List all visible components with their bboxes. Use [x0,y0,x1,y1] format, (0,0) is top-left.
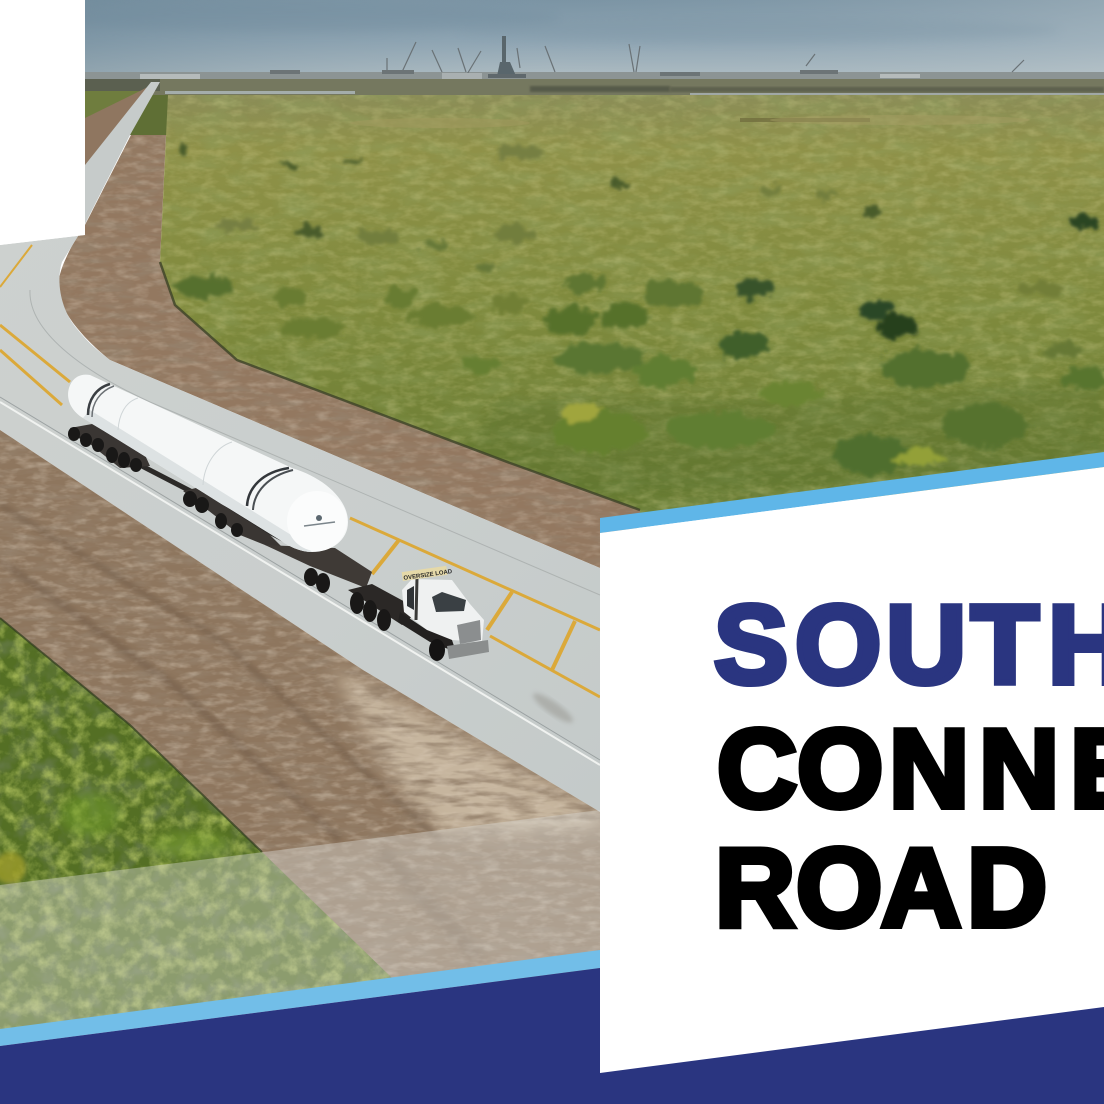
trailer and wheels [68,424,420,631]
sign: oversize load: OVERSIZE LOAD [403,569,453,582]
white corner panel top left [0,0,85,245]
light blue stripe lower left [0,950,600,1046]
yellow road markings [0,245,600,697]
industrial skyline on horizon [85,36,1104,80]
distant marsh [85,79,1104,135]
lower dirt shoulder [0,430,600,990]
light blue stripe above title panel [600,452,1104,533]
grass field [160,93,1104,528]
truck cab [398,566,489,661]
navy base band [0,968,1104,1104]
title panel [600,467,1104,1073]
roadside vegetation [0,618,395,1043]
translucent light band [0,810,600,1050]
title [714,583,1104,950]
dirt shoulder along road [50,130,650,570]
upper road into distance [85,82,160,224]
truck with oversize tank [68,375,489,661]
shrubs in the field [177,146,1104,475]
concrete road [0,225,600,812]
sky [0,0,1104,76]
title line: Road: ROAD [715,826,1047,950]
white tank [68,375,348,552]
